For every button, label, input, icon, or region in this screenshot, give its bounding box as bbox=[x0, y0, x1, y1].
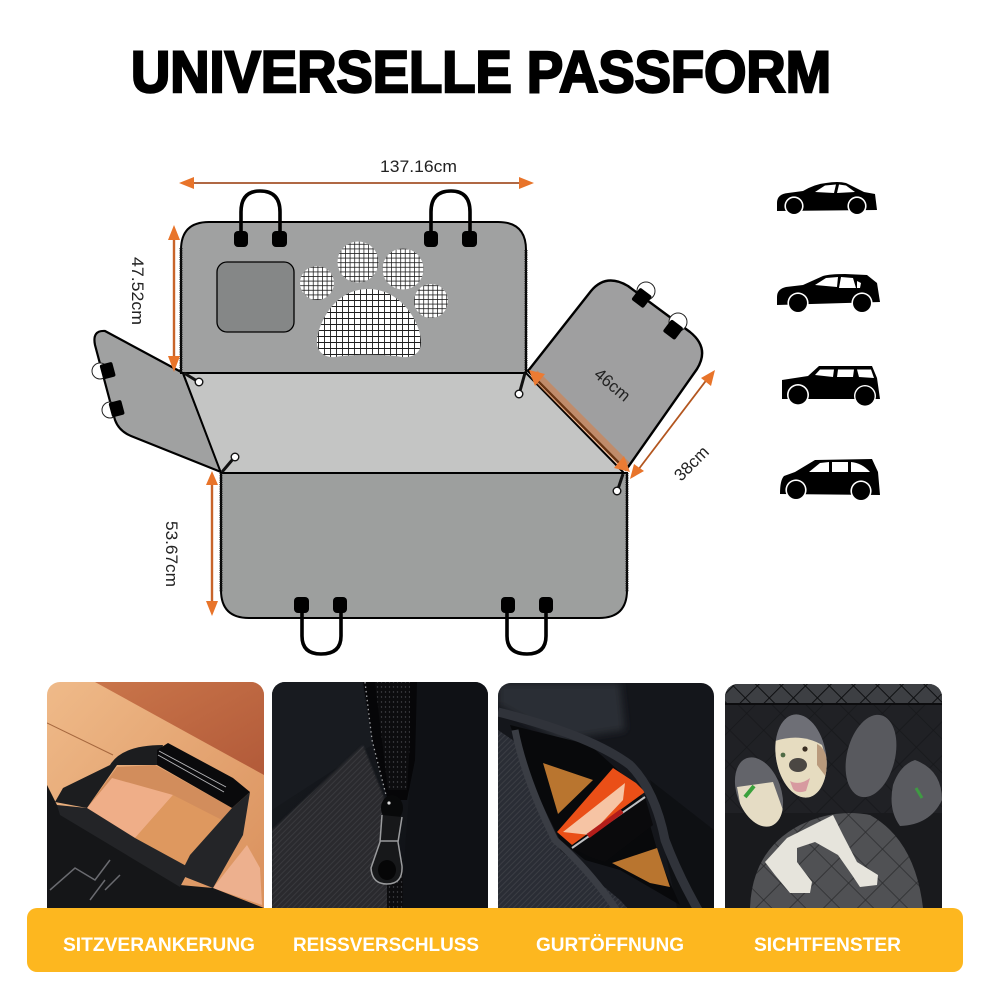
arrow: flap width bbox=[630, 370, 715, 479]
caption: belt opening: GURTÖFFNUNG bbox=[536, 933, 684, 956]
black quilted cover bbox=[47, 785, 264, 908]
upper left toe with dog head bbox=[775, 714, 827, 798]
label: backrest height: 47.52cm bbox=[128, 257, 147, 325]
opening behind the strap bbox=[88, 765, 232, 820]
opening interior bbox=[510, 725, 680, 905]
tan seat showing bbox=[543, 763, 593, 814]
photo: seat anchor bbox=[47, 682, 264, 922]
seam edge bbox=[498, 712, 705, 922]
panel: right side flap bbox=[528, 281, 702, 470]
icon: top left strap bbox=[234, 191, 287, 247]
zipper tape bbox=[363, 682, 417, 800]
icon: bottom right strap bbox=[501, 597, 553, 654]
caption: seat anchor: SITZVERANKERUNG bbox=[63, 934, 255, 956]
caption: viewing window: SICHTFENSTER bbox=[754, 934, 901, 956]
icon: bottom left strap bbox=[294, 597, 347, 654]
main paw pad bbox=[750, 813, 923, 908]
caption: zipper: REISSVERSCHLUSS bbox=[293, 934, 479, 956]
dog body and paws bbox=[765, 815, 878, 893]
label: flap width: 38cm bbox=[670, 442, 713, 485]
lower right toe bbox=[892, 760, 942, 826]
window pocket bbox=[217, 262, 294, 332]
panel: caption banner bbox=[27, 908, 963, 972]
icon: SUV bbox=[782, 366, 880, 407]
panel: bottom apron section bbox=[221, 473, 627, 618]
arrow: backrest height bbox=[168, 225, 180, 372]
upper right toe bbox=[846, 714, 896, 798]
panel: left side flap bbox=[92, 331, 221, 472]
arrow: flap length bbox=[529, 370, 630, 472]
label: apron height: 53.67cm bbox=[162, 521, 181, 587]
arrow: apron height bbox=[206, 471, 218, 616]
lower left toe with dog ear bbox=[735, 757, 783, 827]
icon: sedan bbox=[777, 182, 877, 216]
photo: viewing window with dog bbox=[725, 684, 942, 924]
icon: left flap fasteners bbox=[92, 362, 125, 418]
arrow: width dimension bbox=[179, 177, 534, 189]
title: UNIVERSELLE PASSFORM bbox=[131, 40, 831, 105]
lower right seat bbox=[213, 845, 262, 905]
upper seat back bbox=[95, 682, 264, 775]
photo: zipper bbox=[272, 682, 488, 922]
label: flap length: 46cm bbox=[590, 365, 634, 405]
strap loop bbox=[55, 745, 163, 808]
icon: mesh paw window bbox=[300, 242, 448, 357]
buckle bbox=[557, 768, 653, 849]
icon: van bbox=[780, 459, 880, 502]
panel: seat middle section bbox=[183, 373, 624, 473]
icon: zipper pulls bbox=[184, 373, 623, 495]
icon: top right strap bbox=[424, 191, 477, 247]
seat cover diagram bbox=[92, 191, 702, 654]
label: width: 137.16cm bbox=[380, 157, 457, 176]
icon: crossover bbox=[777, 274, 880, 314]
photo: belt opening bbox=[498, 683, 714, 923]
icon: right flap fasteners bbox=[631, 282, 687, 340]
zipper pull bbox=[371, 795, 403, 884]
panel: backrest section bbox=[181, 222, 526, 373]
